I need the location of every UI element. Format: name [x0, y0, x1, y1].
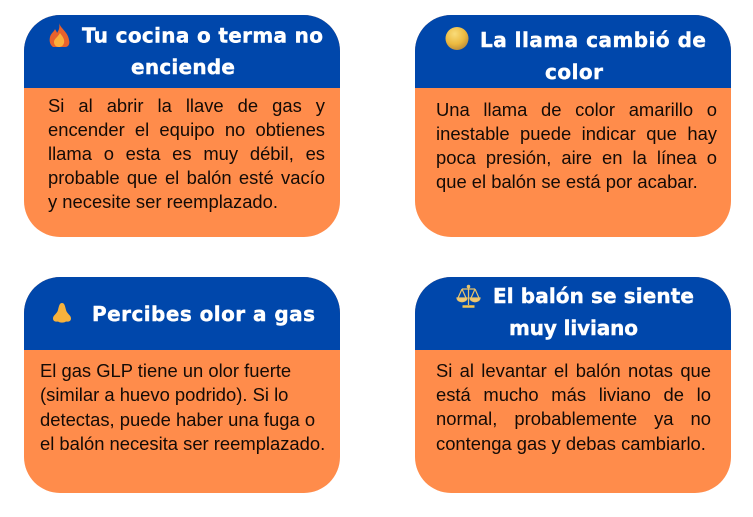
heading: El balón se siente muy liviano: muy liviano: [509, 316, 638, 340]
text block: description: Si al levantar el balón notas que: [436, 360, 711, 381]
icon: flame: [50, 23, 69, 47]
text block: description: encender el equipo no obtienes: [48, 119, 325, 140]
text block: description: está mucho más liviano de lo: [436, 384, 711, 405]
heading: La llama cambió de color: [415, 15, 731, 88]
text block: description: y necesite ser reemplazado.: [48, 191, 278, 212]
panel: El balón se siente muy liviano: [415, 277, 731, 493]
heading: La llama cambió de color: La llama cambió de: [480, 28, 706, 52]
heading: Tu cocina o terma no enciende: Tu cocina o terma no: [82, 24, 323, 48]
heading: El balón se siente muy liviano: [415, 277, 731, 350]
icon: yellow circle: [446, 27, 468, 50]
heading: El balón se siente muy liviano: El balón se siente: [493, 284, 694, 308]
heading: Percibes olor a gas: Percibes olor a gas: [92, 302, 315, 326]
text block: description: el balón necesita ser reemplazado.: [40, 433, 325, 454]
heading: Tu cocina o terma no enciende: [24, 15, 340, 88]
text block: description: detectas, puede haber una fuga o: [40, 409, 315, 430]
text block: description: [436, 99, 717, 192]
panel: Tu cocina o terma no enciende: [24, 15, 340, 237]
text block: description: [40, 360, 325, 454]
text block: description: [436, 360, 711, 454]
text block: description: llama o esta es muy débil, es: [48, 143, 325, 164]
text block: description: probable que el balón esté vacío: [48, 167, 325, 188]
heading: Percibes olor a gas: [24, 277, 340, 350]
text block: description: inestable puede indicar que hay: [436, 123, 717, 144]
text block: description: que el balón se está por acabar.: [436, 171, 698, 192]
text block: description: [48, 95, 325, 212]
text block: description: (similar a huevo podrido). Si lo: [40, 384, 288, 405]
text block: description: El gas GLP tiene un olor fuerte: [40, 360, 291, 381]
text block: description: Una llama de color amarillo o: [436, 99, 717, 120]
icon: balance scales: [457, 285, 480, 306]
panel: Percibes olor a gas: [24, 277, 340, 493]
text block: description: Si al abrir la llave de gas y: [48, 95, 325, 116]
panel: La llama cambió de color: [415, 15, 731, 237]
text block: description: poca presión, aire en la línea o: [436, 147, 717, 168]
text block: description: normal, probablemente ya no: [436, 408, 711, 429]
text block: description: contenga gas y debas cambiarlo.: [436, 433, 706, 454]
icon: nose: [53, 303, 71, 323]
heading: Tu cocina o terma no enciende: enciende: [131, 55, 235, 79]
heading: La llama cambió de color: color: [545, 60, 603, 84]
